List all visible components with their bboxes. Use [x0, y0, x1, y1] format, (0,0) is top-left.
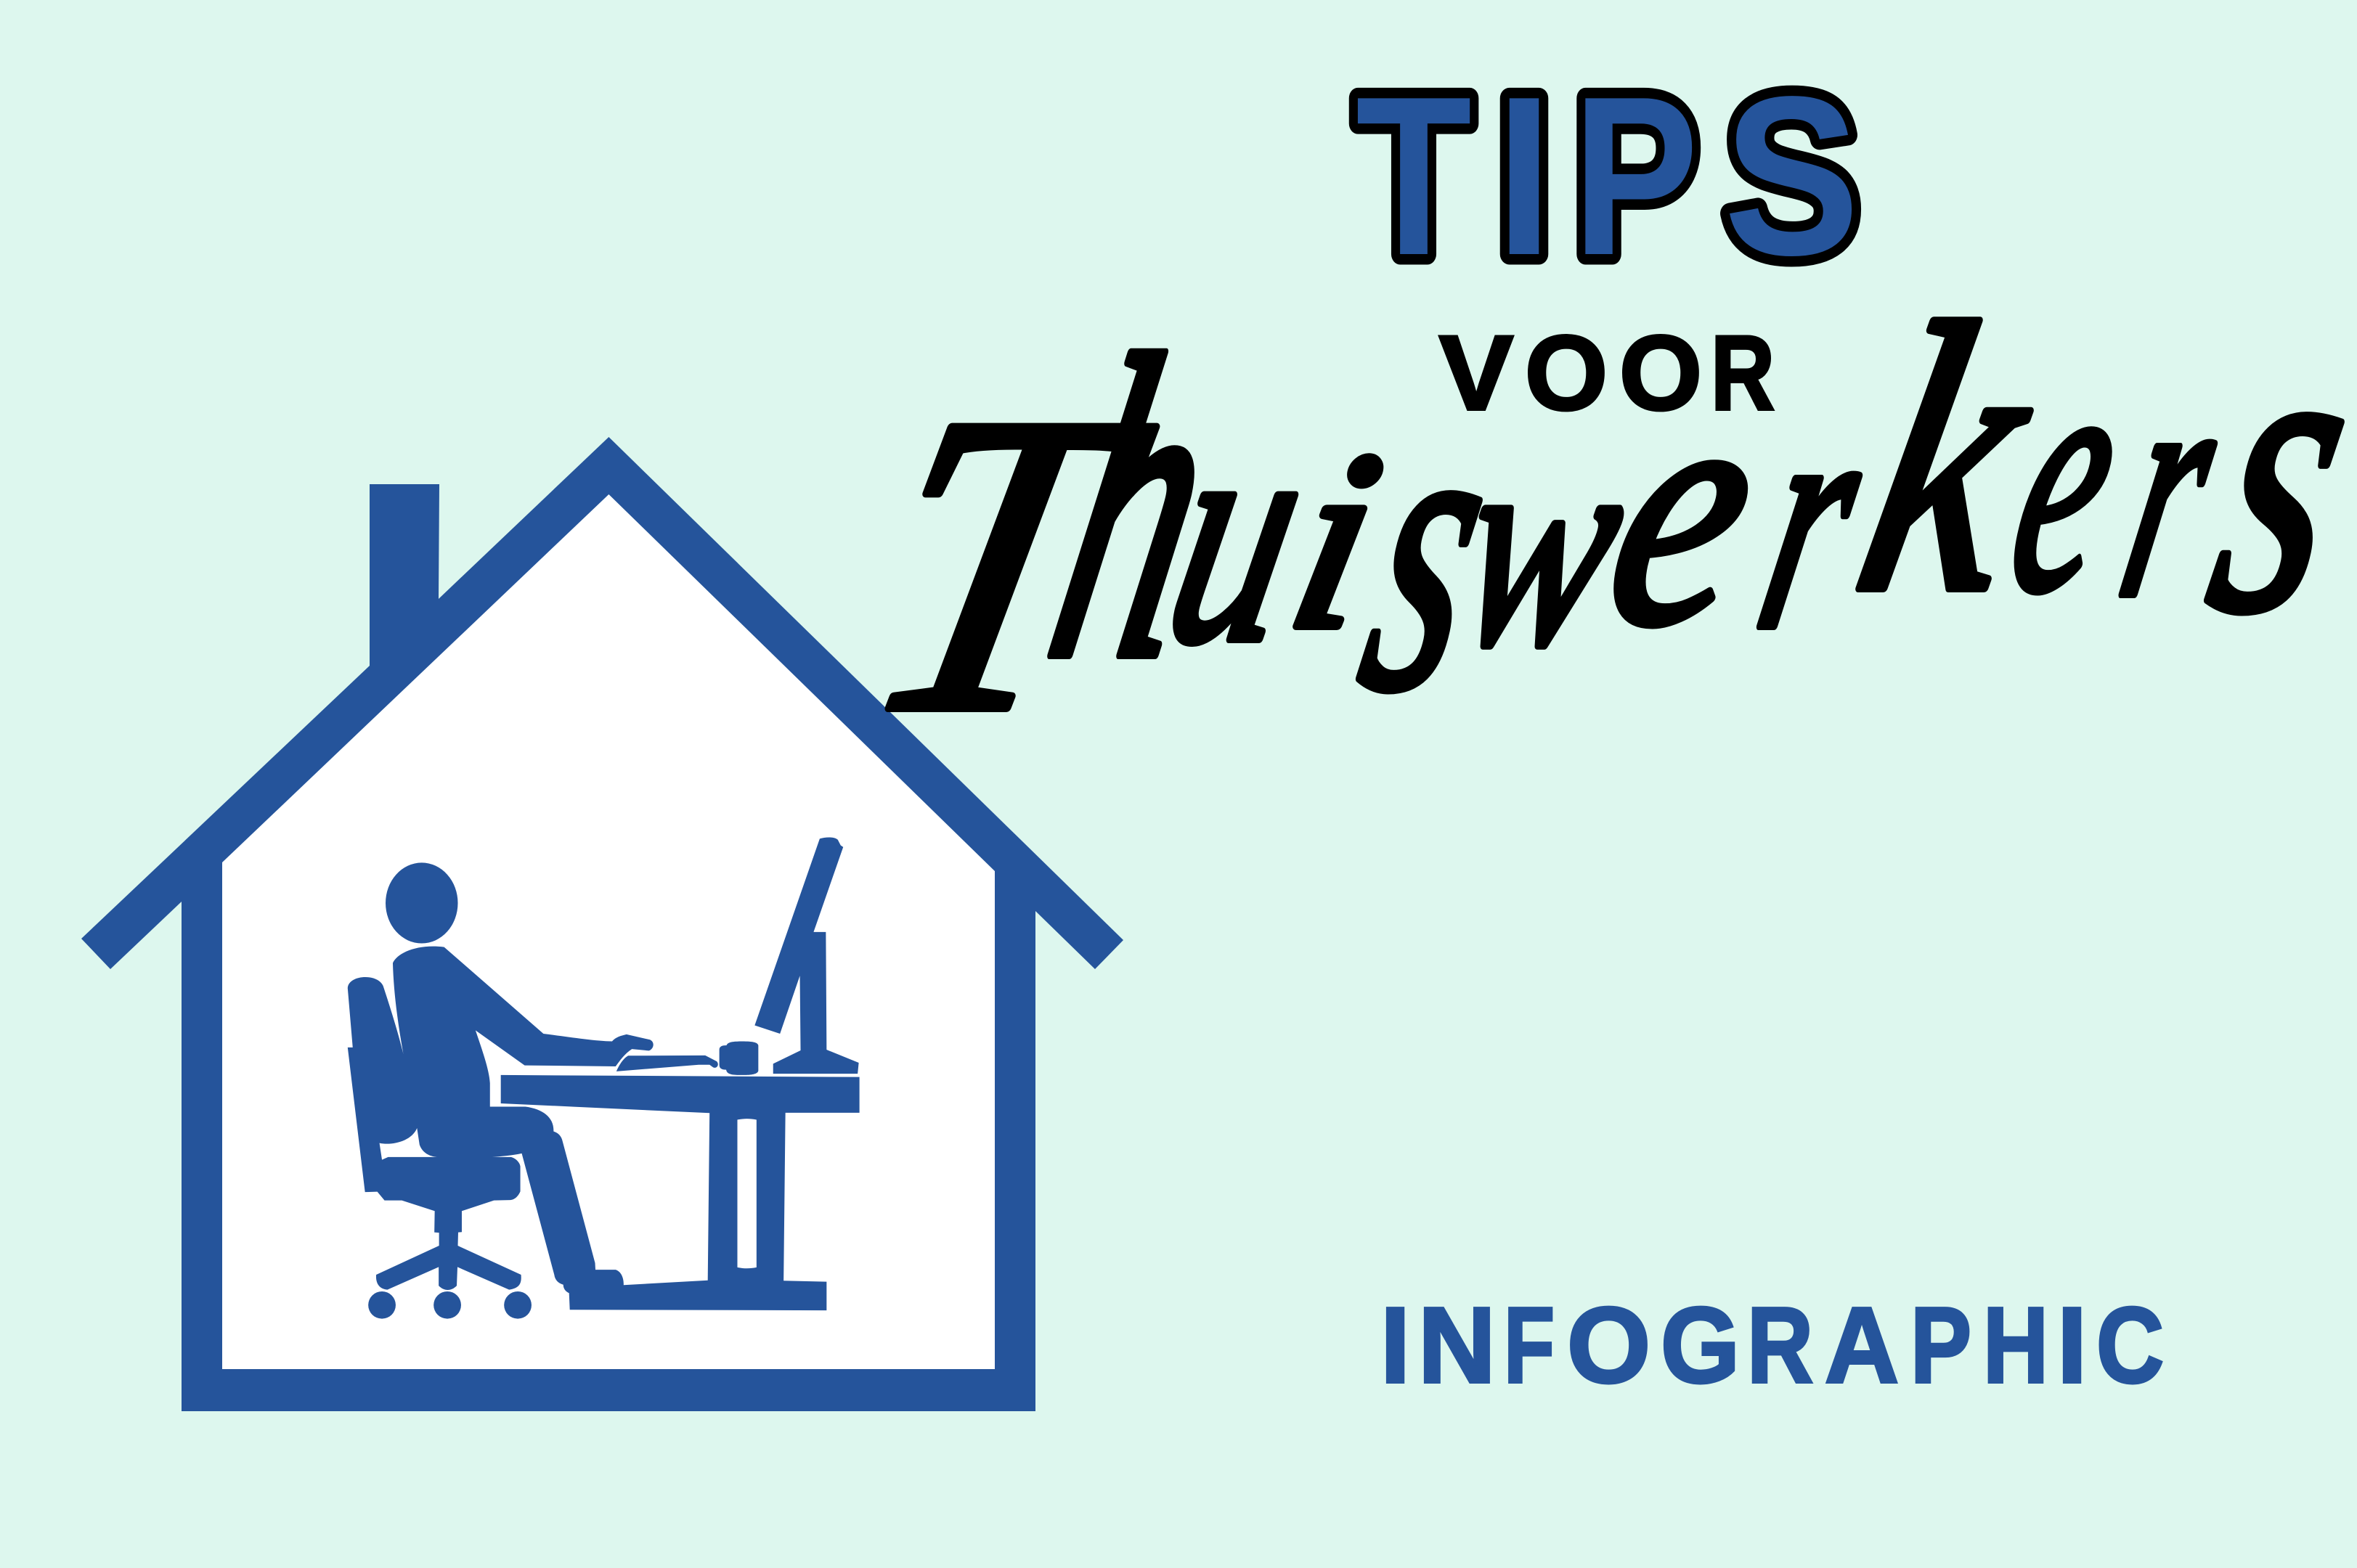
chair gap [380, 1128, 437, 1160]
script title: Thuiswerkers: e [1584, 324, 1786, 694]
title: TIPS: S [1724, 50, 1860, 303]
script title: Thuiswerkers: h [1021, 267, 1250, 750]
title: TIPS: T [1356, 50, 1472, 303]
body, chair and desk silhouette [348, 947, 860, 1310]
house illustration [81, 437, 1123, 1411]
script title: Thuiswerkers: r [2099, 310, 2246, 663]
mug [720, 1042, 758, 1075]
desk leg gap [737, 1119, 757, 1268]
title: TIPS: I [1496, 50, 1552, 303]
label: INFOGRAPHIC: F [1504, 1286, 1555, 1405]
chair wheels [368, 1291, 532, 1319]
label: INFOGRAPHIC: H [1983, 1286, 2048, 1405]
label: INFOGRAPHIC: P [1910, 1286, 1971, 1405]
script title: Thuiswerkers: u [1146, 362, 1332, 707]
subtitle: VOOR: V [1439, 314, 1513, 432]
script title: Thuiswerkers: s [1335, 324, 1525, 775]
label: INFOGRAPHIC: C [2096, 1286, 2164, 1405]
script title: Thuiswerkers: T [835, 327, 1181, 801]
computer monitor [754, 837, 859, 1074]
script title: Thuiswerkers: i [1271, 399, 1401, 681]
house white interior [222, 494, 995, 1369]
label: INFOGRAPHIC: R [1747, 1286, 1813, 1405]
person at desk [348, 837, 860, 1319]
label: INFOGRAPHIC: I [1380, 1286, 1410, 1405]
subtitle: VOOR: O [1525, 314, 1608, 432]
house outline and chimney [81, 437, 1123, 1411]
subtitle: VOOR: O [1619, 314, 1702, 432]
script title: Thuiswerkers: r [1736, 342, 1891, 695]
label: INFOGRAPHIC: A [1825, 1286, 1899, 1405]
label: INFOGRAPHIC: N [1418, 1286, 1496, 1405]
keyboard [616, 1055, 718, 1071]
label: INFOGRAPHIC: I [2057, 1286, 2087, 1405]
head [386, 862, 458, 944]
label: INFOGRAPHIC: O [1567, 1286, 1650, 1405]
title: TIPS: P [1573, 50, 1698, 303]
label: INFOGRAPHIC: G [1661, 1286, 1740, 1405]
subtitle: VOOR: R [1711, 314, 1775, 432]
script title: Thuiswerkers: k [1832, 245, 2069, 671]
script title: Thuiswerkers: e [1987, 290, 2149, 661]
script title: Thuiswerkers: w [1436, 385, 1651, 706]
